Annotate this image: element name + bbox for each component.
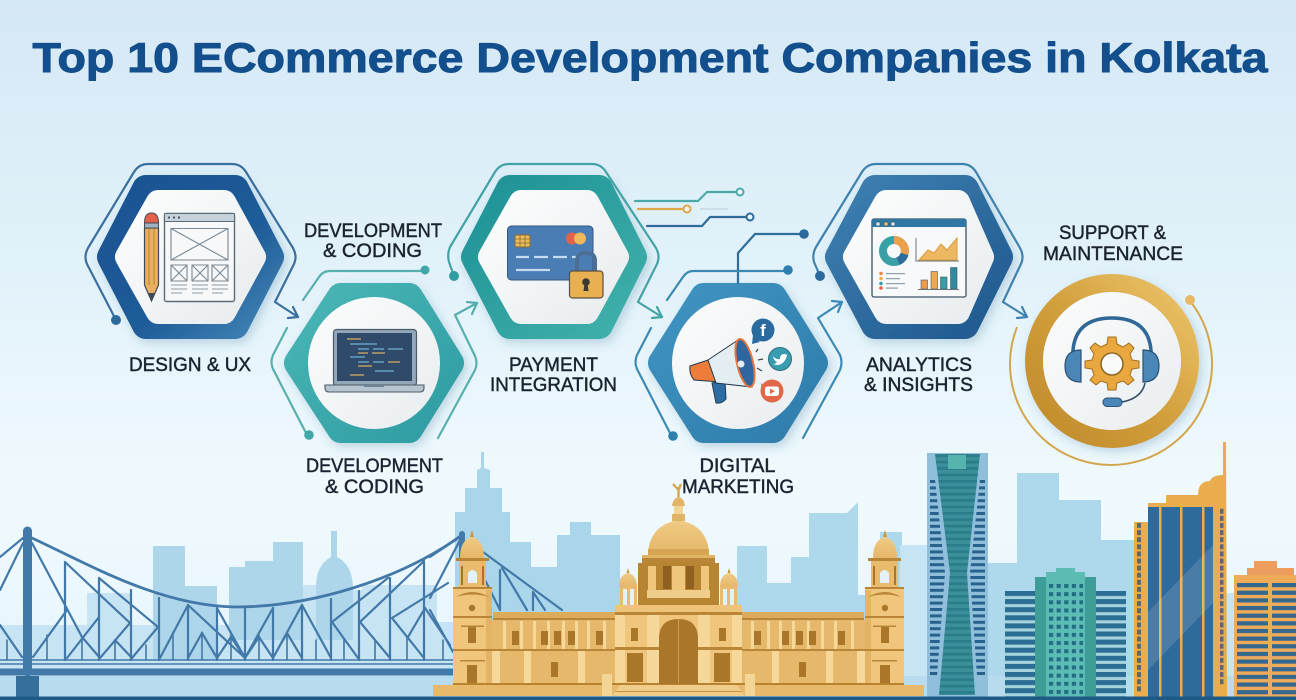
twisted skyscraper bbox=[927, 453, 988, 697]
label: Support & Maintenance: SUPPORT & bbox=[1059, 222, 1166, 244]
label: Support & Maintenance bbox=[1043, 222, 1183, 265]
connector dots bbox=[304, 266, 430, 440]
label: Support & Maintenance: MAINTENANCE bbox=[1043, 243, 1183, 265]
icon: credit card and lock bbox=[508, 226, 603, 298]
hexagon frame bbox=[839, 189, 999, 325]
hexagon frame bbox=[662, 297, 814, 429]
connector arrow bbox=[813, 164, 1027, 318]
outer arc bbox=[1010, 301, 1212, 465]
Howrah bridge bbox=[0, 531, 562, 697]
label: Analytics & Insights bbox=[864, 354, 973, 396]
connector lines bbox=[272, 271, 477, 438]
hexagon frame bbox=[298, 297, 450, 429]
step 5: analytics and insights bbox=[813, 164, 1027, 396]
label: Development & Coding bottom: DEVELOPMENT bbox=[306, 455, 443, 477]
label: Development & Coding bottom bbox=[306, 455, 443, 498]
Victoria Memorial palace bbox=[433, 484, 924, 696]
icon: megaphone and social bubbles bbox=[690, 318, 792, 403]
icon: analytics dashboard bbox=[872, 219, 966, 297]
white inner hexagon bbox=[855, 202, 982, 312]
connector dot bbox=[111, 315, 121, 325]
icon: pencil and wireframe bbox=[144, 213, 234, 302]
label: Development & Coding top: & CODING bbox=[323, 240, 422, 262]
connector arrow bbox=[448, 164, 662, 318]
label: Analytics & Insights: ANALYTICS bbox=[866, 354, 972, 376]
icon: headset and gear bbox=[1065, 318, 1159, 406]
step 2: development and coding bbox=[272, 220, 477, 498]
step 4: digital marketing bbox=[636, 229, 842, 498]
circuit lines bbox=[635, 188, 754, 226]
label: Development & Coding top: DEVELOPMENT bbox=[304, 220, 442, 242]
label: Development & Coding top bbox=[304, 220, 442, 262]
label: Design & UX: DESIGN & UX bbox=[129, 354, 251, 376]
connector lines bbox=[636, 234, 842, 438]
orange building bbox=[1234, 561, 1296, 697]
label: Analytics & Insights: & INSIGHTS bbox=[864, 374, 973, 396]
arc dot bbox=[1185, 295, 1195, 305]
gold and blue tower bbox=[1134, 442, 1227, 697]
city skyline backdrop bbox=[0, 452, 1296, 697]
step 1: design and UX bbox=[86, 164, 298, 376]
label: Payment Integration: INTEGRATION bbox=[490, 374, 617, 396]
white inner hexagon bbox=[490, 202, 617, 312]
hexagon frame bbox=[475, 189, 633, 325]
ground strip bbox=[0, 696, 1296, 700]
title: Top 10 ECommerce Development Companies in Kolkata bbox=[32, 34, 1268, 81]
connector dots bbox=[668, 229, 809, 441]
label: Development & Coding bottom: & CODING bbox=[325, 476, 424, 498]
label: Payment Integration bbox=[490, 354, 617, 396]
white circle bbox=[1043, 292, 1181, 430]
icon: megaphone and social bubbles: f bbox=[760, 321, 766, 340]
hexagon frame bbox=[111, 189, 270, 325]
label: Digital Marketing: MARKETING bbox=[682, 476, 794, 498]
icon: laptop with code bbox=[325, 330, 424, 392]
bridge cable and verticals bbox=[0, 535, 562, 664]
step 3: payment integration bbox=[448, 164, 754, 396]
teal building bbox=[1005, 568, 1126, 697]
label: Payment Integration: PAYMENT bbox=[509, 354, 598, 376]
white inner hexagon bbox=[127, 202, 254, 312]
white circle bbox=[308, 297, 440, 429]
gold ring bbox=[1034, 283, 1190, 439]
label: Digital Marketing: DIGITAL bbox=[700, 455, 776, 477]
step 6: support and maintenance bbox=[1010, 222, 1212, 465]
connector dot bbox=[449, 271, 459, 281]
connector dot bbox=[815, 271, 825, 281]
label: Digital Marketing bbox=[682, 455, 794, 498]
connector arrow bbox=[86, 164, 298, 320]
white circle bbox=[672, 297, 804, 429]
